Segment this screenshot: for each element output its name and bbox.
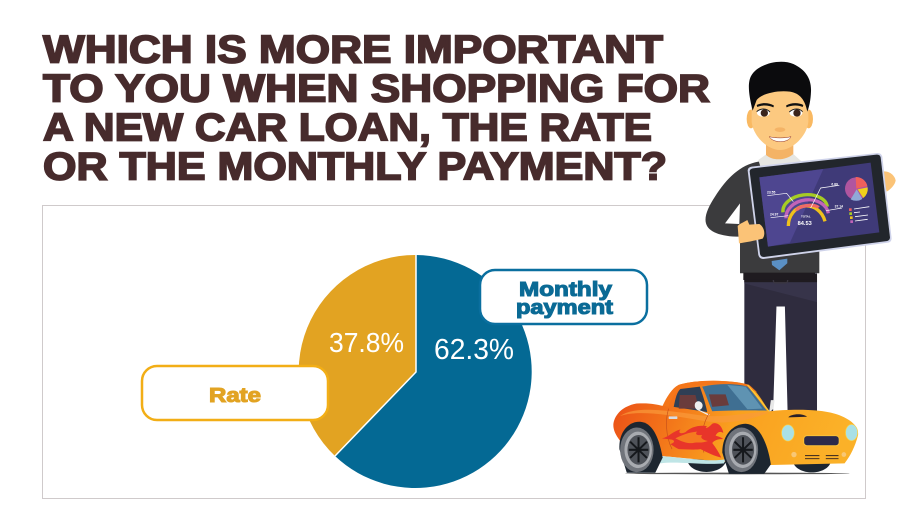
pie chart (299, 255, 532, 488)
title: OR THE MONTHLY PAYMENT? (43, 146, 667, 188)
flames (662, 423, 723, 458)
label: rate (142, 366, 328, 420)
body (613, 381, 858, 465)
hood scoop (788, 414, 807, 417)
roof edge (663, 381, 757, 407)
face (752, 87, 808, 150)
panel: chart frame (42, 206, 866, 498)
tablet numbers: 23.55 (767, 191, 775, 195)
ears (747, 110, 755, 128)
far wheels (687, 459, 831, 472)
neck (766, 140, 793, 159)
tablet legend (849, 208, 852, 211)
tablet screen (759, 163, 879, 247)
windshield (702, 384, 767, 411)
side skirt (657, 456, 726, 464)
door handle (669, 416, 677, 419)
slice: rate (299, 255, 416, 456)
value: 62.3%: 62.3% (434, 334, 514, 366)
title: WHICH IS MORE IMPORTANT (43, 28, 663, 72)
smile (769, 137, 791, 142)
tablet: 37.14 (835, 204, 843, 208)
front wheel (725, 428, 758, 472)
value: 37.8%: 37.8% (329, 327, 404, 358)
car (613, 381, 858, 474)
rear wheel (620, 428, 654, 472)
front hand (738, 220, 764, 243)
grille (804, 436, 839, 446)
belt line (743, 273, 815, 280)
slice: monthly payment (335, 255, 532, 488)
tablet: 24.97 (770, 213, 778, 217)
body highlight (620, 410, 769, 422)
nose (775, 127, 785, 132)
label: monthly payment: payment (516, 297, 613, 319)
ground shadow (625, 473, 850, 474)
tie tip (772, 259, 787, 270)
back hand (882, 171, 896, 192)
title (43, 28, 710, 188)
wheel arches (619, 422, 663, 473)
seats (679, 394, 729, 409)
tablet (748, 153, 892, 259)
lower vents (805, 456, 839, 459)
label: monthly payment (480, 270, 647, 324)
gauge callout lines (767, 185, 842, 218)
hair (749, 62, 811, 112)
person legs (744, 273, 817, 412)
eyes (757, 109, 770, 117)
tablet: 6.89 (831, 183, 838, 187)
tablet: 84.53 (798, 221, 812, 227)
side mirror (695, 401, 710, 416)
tablet: TOTAL (801, 215, 811, 219)
label: monthly payment: Monthly (519, 279, 613, 301)
person: upper body with tablet (706, 62, 896, 280)
torso (706, 162, 819, 273)
door line (666, 409, 709, 453)
title: TO YOU WHEN SHOPPING FOR (43, 68, 710, 110)
rear window (674, 387, 707, 412)
collar (758, 154, 802, 167)
headlights (782, 425, 794, 441)
title: A NEW CAR LOAN, THE RATE (43, 106, 652, 150)
tablet pie (845, 177, 868, 200)
eyebrows (757, 103, 803, 107)
mirror far (769, 400, 775, 412)
label: rate: Rate (209, 385, 261, 407)
gauge (783, 195, 828, 226)
